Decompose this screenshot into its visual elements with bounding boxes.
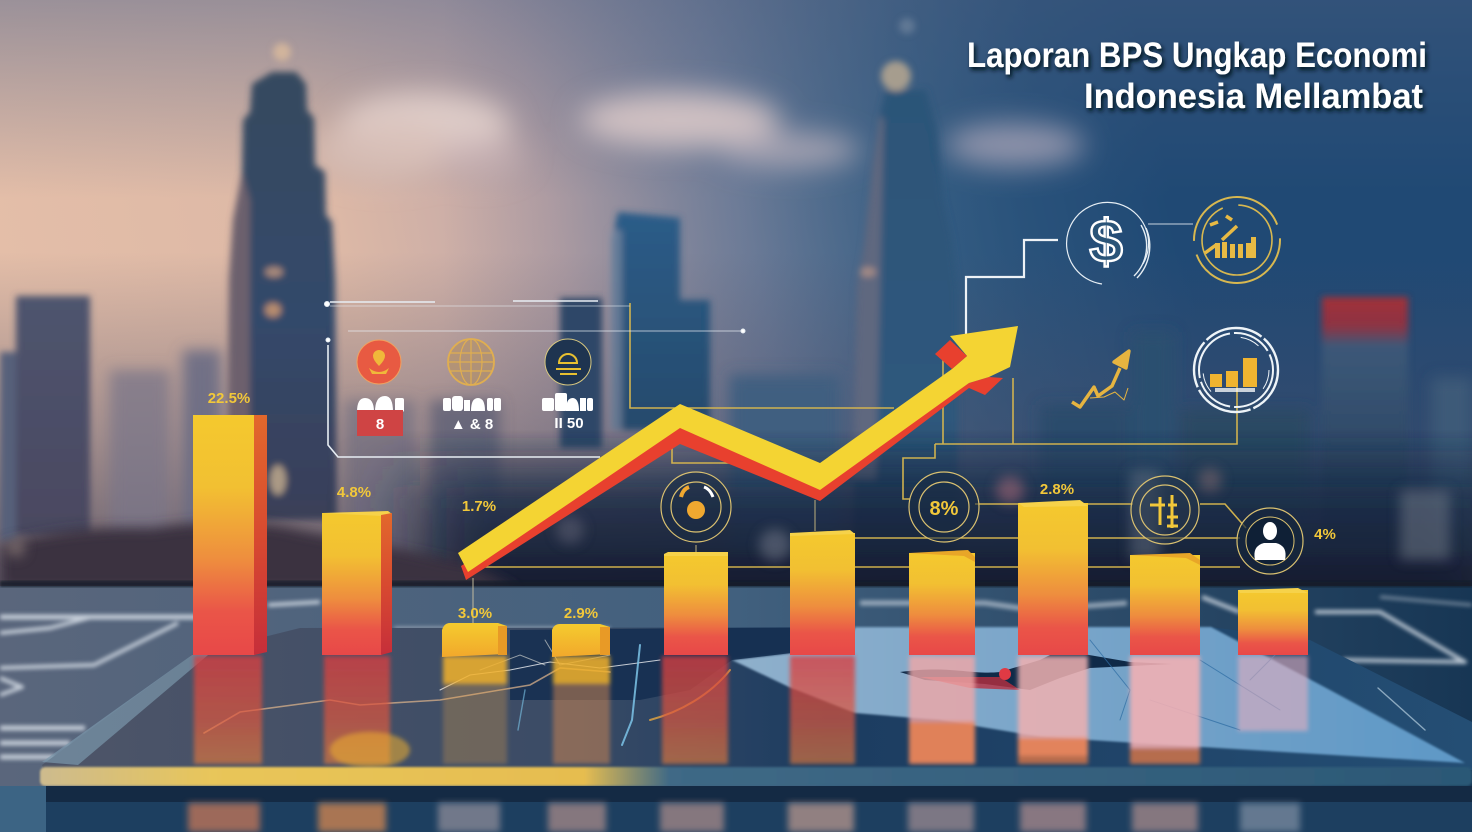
icon: gold globe bbox=[448, 339, 494, 385]
dark foreground band bbox=[0, 430, 1472, 590]
icon: dark dome badge bbox=[545, 339, 591, 385]
table white circuit lines bbox=[0, 597, 1472, 757]
bar 3 bbox=[442, 623, 507, 657]
panel frame lines bbox=[324, 301, 745, 457]
link line bbox=[1148, 223, 1193, 225]
left tower bbox=[228, 72, 337, 520]
title: Indonesia Mellambat bbox=[1084, 77, 1423, 116]
bar 1 bbox=[193, 415, 267, 655]
bar value labels: 3.0% bbox=[458, 605, 492, 622]
bar 6 bbox=[790, 530, 855, 655]
clouds bbox=[315, 92, 1085, 180]
left building bbox=[16, 296, 90, 536]
tablet front edge bbox=[0, 767, 1472, 832]
bar value labels: 22.5% bbox=[208, 390, 250, 407]
bar value labels bbox=[208, 390, 1336, 622]
icon: red location badge bbox=[357, 340, 401, 384]
sky background bbox=[0, 0, 1472, 600]
red top building bbox=[1322, 297, 1408, 542]
bar 9 bbox=[1130, 553, 1200, 655]
map routes bbox=[204, 640, 1425, 745]
bar value labels: 2.9% bbox=[564, 605, 598, 622]
value labels: ▲ & 8 bbox=[451, 416, 493, 433]
upper right icons bbox=[1067, 197, 1280, 412]
bar reflections on tablet bbox=[194, 656, 1308, 768]
bar value labels: 4% bbox=[1314, 526, 1336, 543]
bar 5 bbox=[664, 552, 728, 655]
stepped connector bbox=[966, 240, 1058, 345]
icon: coin badge bbox=[661, 472, 731, 542]
icon: gold growth chart ring bbox=[1194, 197, 1280, 283]
bar chart bbox=[193, 415, 1308, 657]
tablet with map bbox=[42, 627, 1472, 770]
map land mass bbox=[510, 627, 1465, 763]
icon: tower glyph badge bbox=[1131, 476, 1199, 544]
value labels bbox=[451, 415, 584, 433]
bar 2 bbox=[322, 511, 392, 655]
table reflections of bars bbox=[188, 803, 1300, 832]
gold connector lines bbox=[470, 303, 1246, 624]
bar value labels: 1.7% bbox=[462, 498, 496, 515]
right tower bbox=[853, 90, 958, 560]
title: Laporan BPS Ungkap Economi bbox=[967, 36, 1427, 75]
lower circular icons bbox=[661, 472, 1303, 574]
mid building bbox=[612, 212, 710, 430]
icon: percent badge: 8% bbox=[930, 498, 959, 520]
bar value labels: 4.8% bbox=[337, 484, 371, 501]
icon: percent badge bbox=[909, 472, 979, 542]
icon: gold trend line bbox=[1072, 351, 1129, 407]
bar 10 bbox=[1238, 588, 1308, 655]
table surface bbox=[0, 581, 1472, 832]
red value box: 8 bbox=[376, 416, 384, 433]
bar value labels: 2.8% bbox=[1040, 481, 1074, 498]
icon: dollar ring: $ bbox=[1089, 208, 1123, 275]
blurred city skyline bbox=[0, 18, 1472, 560]
label blocks bbox=[357, 393, 593, 412]
title bbox=[967, 36, 1427, 116]
bar 7 bbox=[909, 550, 975, 655]
bar 4 bbox=[552, 624, 610, 657]
value labels: II 50 bbox=[554, 415, 584, 432]
trend arrow bbox=[458, 326, 1018, 580]
left info panel bbox=[324, 301, 745, 457]
icon: dollar ring bbox=[1067, 202, 1150, 284]
bar 8 bbox=[1018, 500, 1088, 655]
icon: person badge bbox=[1237, 508, 1303, 574]
red value box bbox=[357, 410, 403, 436]
icon: white ring bar chart bbox=[1194, 328, 1278, 412]
